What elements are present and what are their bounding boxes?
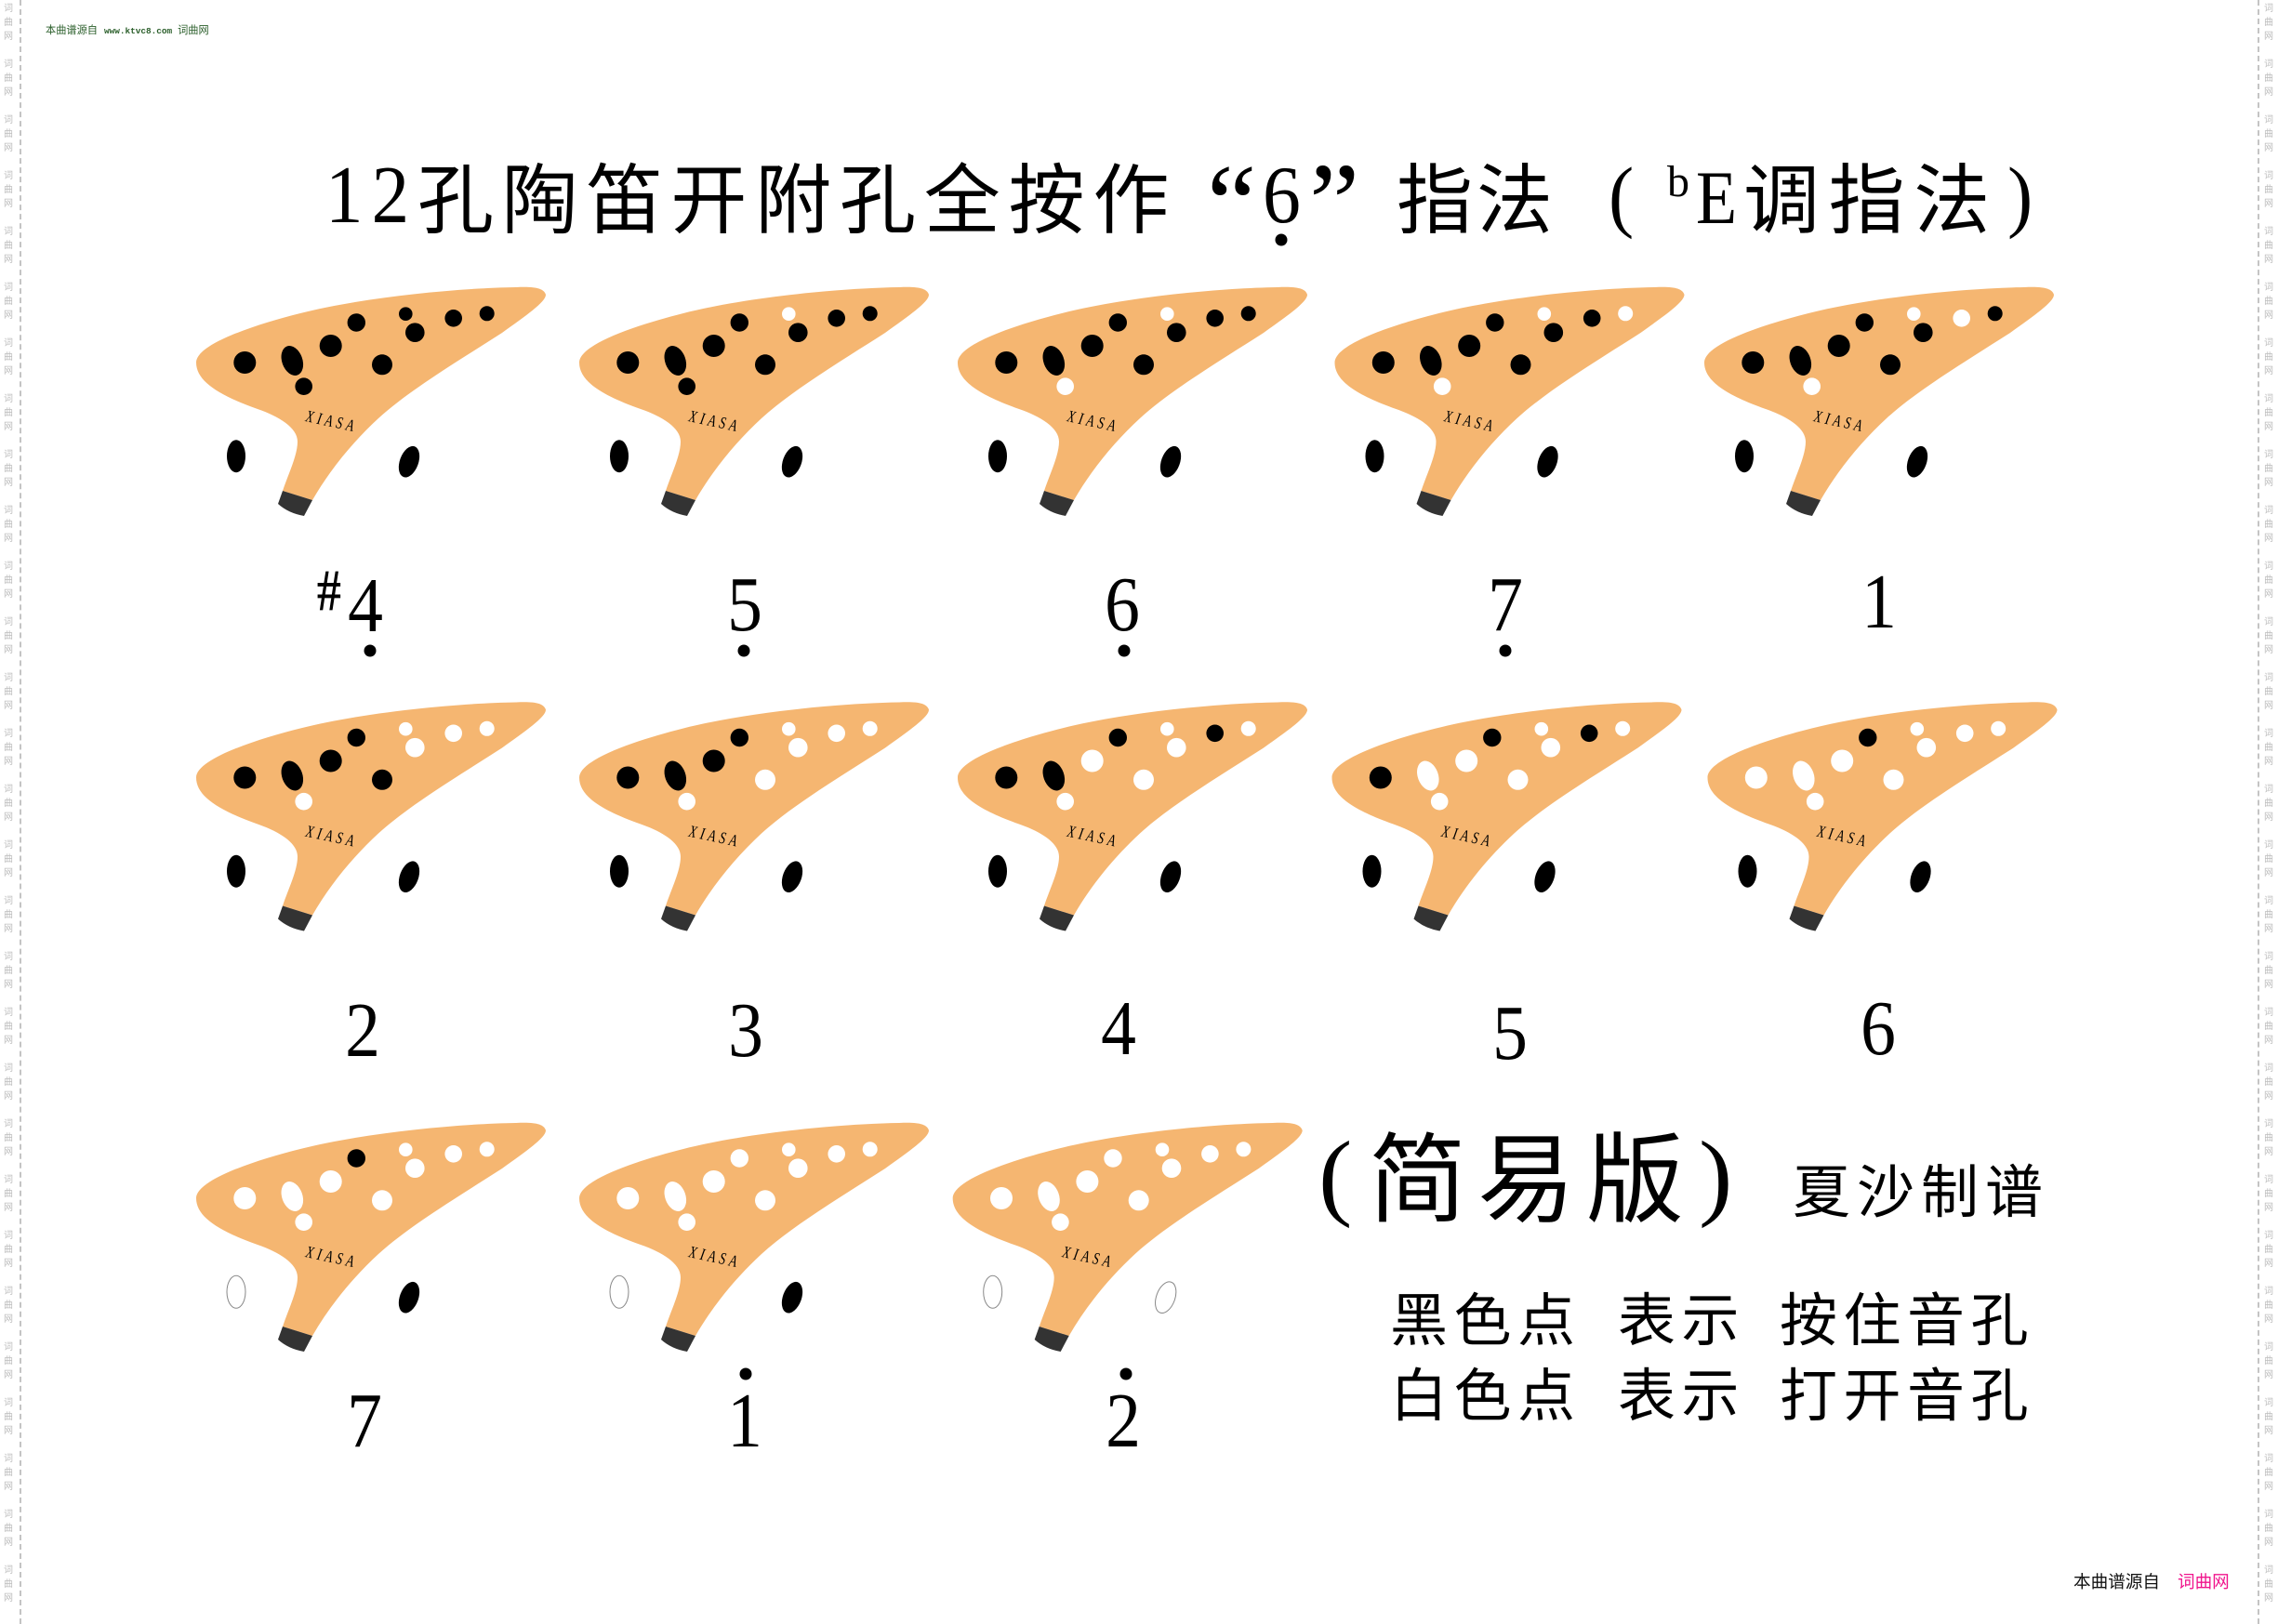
left watermark strip: 词 [4,1004,13,1018]
title: 孔陶笛开附孔全按作 [417,139,1177,249]
left watermark strip: 词 [4,167,13,181]
right watermark strip: 词 [2264,614,2273,627]
note label: low 7: 7 [1488,561,1523,648]
left watermark strip: 网 [4,418,13,432]
right watermark strip: 网 [2264,363,2273,376]
ocarina: high 2: XIASA [1060,1243,1116,1272]
right watermark strip: 词 [2264,335,2273,349]
left watermark strip: 网 [4,976,13,990]
right watermark strip: 词 [2264,56,2273,70]
right watermark strip: 网 [2264,1311,2273,1325]
legend: black dot: 按住音孔 [1780,1274,2034,1357]
right watermark strip: 网 [2264,1143,2273,1157]
ocarina: high 1 [579,1123,929,1352]
left watermark strip: 曲 [4,293,13,307]
left watermark strip: 曲 [4,1297,13,1311]
right watermark strip: 曲 [2264,572,2273,586]
left watermark strip: 词 [4,1171,13,1185]
left watermark strip: 曲 [4,1018,13,1032]
right watermark strip: 网 [2264,251,2273,265]
left watermark strip: 词 [4,0,13,14]
right watermark strip: 曲 [2264,1018,2273,1032]
right watermark strip: 曲 [2264,683,2273,697]
left watermark strip: 曲 [4,181,13,195]
left watermark strip: 词 [4,725,13,739]
left watermark strip: 网 [4,1422,13,1436]
note label: 7: 7 [347,1378,382,1464]
left watermark strip: 词 [4,1450,13,1464]
right watermark strip: 词 [2264,558,2273,572]
left watermark strip: 网 [4,363,13,376]
right watermark strip: 词 [2264,781,2273,795]
ocarina: 5: XIASA [1439,823,1495,852]
left watermark strip: 词 [4,1562,13,1576]
right watermark strip: 网 [2264,84,2273,98]
ocarina: sharp 4 [196,287,546,516]
left watermark strip: 曲 [4,125,13,139]
left watermark strip: 词 [4,1339,13,1353]
title: b [1667,157,1689,206]
right watermark strip: 词 [2264,1506,2273,1520]
left watermark strip: 网 [4,84,13,98]
right watermark strip: 词 [2264,167,2273,181]
legend: black dot [1390,1274,2034,1357]
title: E [1696,155,1737,240]
ocarina: 6 [1707,702,2057,931]
left watermark strip: 曲 [4,906,13,920]
right watermark strip: 曲 [2264,125,2273,139]
right watermark strip: 词 [2264,1060,2273,1074]
left watermark strip: 词 [4,1227,13,1241]
left watermark strip: 网 [4,1311,13,1325]
right watermark strip: 词 [2264,1004,2273,1018]
left watermark strip: 词 [4,446,13,460]
left watermark strip: 网 [4,1032,13,1046]
left watermark strip: 曲 [4,237,13,251]
ocarina: low 7 [1335,287,1685,516]
right watermark strip: 网 [2264,1199,2273,1213]
left watermark strip: 词 [4,669,13,683]
right watermark strip: 网 [2264,28,2273,42]
right watermark strip [2264,0,2273,1604]
ocarina: 7: XIASA [303,1243,359,1272]
left watermark strip: 曲 [4,1464,13,1478]
left watermark strip: 网 [4,1367,13,1380]
right watermark strip: 曲 [2264,1464,2273,1478]
right watermark strip: 词 [2264,1339,2273,1353]
left watermark strip: 曲 [4,572,13,586]
left watermark strip: 词 [4,112,13,125]
right watermark strip: 词 [2264,446,2273,460]
note label: high 1: 1 [727,1378,762,1464]
right watermark strip: 曲 [2264,237,2273,251]
left watermark strip: 曲 [4,516,13,530]
right watermark strip: 词 [2264,223,2273,237]
right watermark strip: 网 [2264,976,2273,990]
note label: sharp 4: # [317,560,341,623]
right watermark strip: 曲 [2264,627,2273,641]
legend: white dot: 表示 [1618,1349,1745,1433]
left watermark strip: 网 [4,1255,13,1269]
right watermark strip: 网 [2264,641,2273,655]
title: 12 [325,151,417,241]
heading: simple edition: ) [1699,1122,1732,1229]
right watermark strip: 网 [2264,920,2273,934]
left watermark strip: 词 [4,558,13,572]
right watermark strip: 词 [2264,837,2273,851]
right watermark strip: 曲 [2264,404,2273,418]
ocarina: low 5 [579,287,929,516]
right watermark strip: 曲 [2264,962,2273,976]
title: ) [2007,152,2033,240]
right watermark strip: 网 [2264,697,2273,711]
left watermark strip: 网 [4,1478,13,1492]
right watermark strip: 网 [2264,139,2273,153]
left watermark strip: 网 [4,865,13,878]
legend: white dot: 白色点 [1390,1349,1582,1433]
right watermark strip: 词 [2264,1450,2273,1464]
source note top left: 本曲谱源自 www.ktvc8.com 词曲网 [46,22,209,37]
right watermark strip: 曲 [2264,1129,2273,1143]
left watermark strip: 网 [4,753,13,767]
left watermark strip: 曲 [4,404,13,418]
left watermark strip: 词 [4,390,13,404]
left watermark strip: 词 [4,1283,13,1297]
right watermark strip: 词 [2264,502,2273,516]
right watermark strip: 网 [2264,195,2273,209]
left watermark strip: 曲 [4,70,13,84]
left watermark strip: 词 [4,56,13,70]
left watermark strip: 曲 [4,795,13,809]
left watermark strip: 网 [4,307,13,321]
right watermark strip: 网 [2264,1534,2273,1548]
left watermark strip: 词 [4,335,13,349]
title: ” [1309,140,1359,266]
note label: 2: 2 [345,987,380,1074]
ocarina: 7 [196,1123,546,1352]
title: ( [1609,152,1634,240]
right watermark strip: 曲 [2264,1185,2273,1199]
left watermark strip: 词 [4,892,13,906]
right watermark strip: 词 [2264,1171,2273,1185]
legend: white dot: 打开音孔 [1780,1349,2034,1433]
left watermark strip: 网 [4,586,13,600]
ocarina: 5 [1331,702,1681,931]
right watermark strip: 词 [2264,279,2273,293]
left watermark strip: 网 [4,697,13,711]
title [325,139,2033,266]
right watermark strip: 网 [2264,1422,2273,1436]
left watermark strip: 曲 [4,627,13,641]
right watermark strip: 词 [2264,1562,2273,1576]
right watermark strip: 曲 [2264,14,2273,28]
note label: 5: 5 [1492,990,1528,1076]
left watermark strip: 曲 [4,851,13,865]
legend: black dot: 表示 [1618,1274,1745,1357]
right watermark strip: 曲 [2264,1353,2273,1367]
ocarina: 4 [958,702,1307,931]
left watermark strip: 网 [4,1143,13,1157]
right watermark strip: 网 [2264,530,2273,544]
right watermark strip: 曲 [2264,906,2273,920]
note label: 1: 1 [1861,559,1897,645]
note label: 6: 6 [1861,985,1896,1072]
right watermark strip: 网 [2264,418,2273,432]
right watermark strip: 网 [2264,865,2273,878]
left watermark strip: 网 [4,1199,13,1213]
ocarina: 1: XIASA [1811,407,1867,436]
right watermark strip: 网 [2264,586,2273,600]
left watermark strip: 曲 [4,1408,13,1422]
right watermark strip: 词 [2264,1394,2273,1408]
title: 指法 [1397,139,1556,249]
title: “ [1207,141,1256,265]
ocarina: 6: XIASA [1815,823,1871,852]
note label: 4: 4 [1101,985,1136,1072]
left watermark strip [4,0,13,1604]
right watermark strip: 曲 [2264,795,2273,809]
left watermark strip: 曲 [4,14,13,28]
left watermark strip: 曲 [4,1185,13,1199]
left watermark strip: 词 [4,223,13,237]
right watermark strip: 网 [2264,1088,2273,1102]
right watermark strip: 网 [2264,1478,2273,1492]
ocarina: 4: XIASA [1065,823,1120,852]
note label: 3: 3 [728,987,763,1074]
right watermark strip: 词 [2264,1116,2273,1129]
left watermark strip: 词 [4,837,13,851]
left watermark strip: 曲 [4,1129,13,1143]
left watermark strip: 曲 [4,460,13,474]
left watermark strip: 曲 [4,683,13,697]
left watermark strip: 曲 [4,1576,13,1590]
ocarina: sharp 4: XIASA [303,407,359,436]
left watermark strip: 曲 [4,739,13,753]
title: 调指法 [1743,139,1999,249]
right watermark strip: 曲 [2264,1241,2273,1255]
left watermark strip: 词 [4,1060,13,1074]
heading: simple edition: 简易版 [1369,1102,1695,1243]
title: 6 [1263,150,1301,241]
left watermark strip: 词 [4,502,13,516]
ocarina: low 6 [958,287,1307,516]
note label: sharp 4 [317,560,383,656]
right watermark strip: 词 [2264,1283,2273,1297]
right watermark strip: 词 [2264,725,2273,739]
note label: high 2: 2 [1106,1378,1141,1464]
right watermark strip: 曲 [2264,1297,2273,1311]
left watermark strip: 词 [4,781,13,795]
right watermark strip: 曲 [2264,1074,2273,1088]
right watermark strip: 词 [2264,669,2273,683]
right watermark strip: 网 [2264,474,2273,488]
ocarina: 2 [196,702,546,931]
right watermark strip: 曲 [2264,1576,2273,1590]
note label: low 5: 5 [727,561,762,648]
left watermark strip: 网 [4,28,13,42]
left watermark strip: 词 [4,1394,13,1408]
ocarina: low 5: XIASA [686,407,742,436]
left watermark strip: 词 [4,614,13,627]
ocarina: 2: XIASA [303,823,359,852]
ocarina: low 7: XIASA [1442,407,1498,436]
left watermark strip: 网 [4,251,13,265]
ocarina: 1 [1704,287,2054,516]
left watermark strip: 网 [4,1590,13,1604]
ocarina: high 1: XIASA [686,1243,742,1272]
ocarina: 3 [579,702,929,931]
right watermark strip: 曲 [2264,516,2273,530]
ocarina: low 6: XIASA [1065,407,1120,436]
right watermark strip: 网 [2264,809,2273,823]
left watermark strip: 曲 [4,962,13,976]
right watermark strip: 曲 [2264,349,2273,363]
legend: white dot [1390,1349,2034,1433]
right watermark strip: 曲 [2264,851,2273,865]
left watermark strip: 网 [4,641,13,655]
left watermark strip: 词 [4,1116,13,1129]
right watermark strip: 曲 [2264,1408,2273,1422]
right watermark strip: 曲 [2264,460,2273,474]
left watermark strip: 词 [4,1506,13,1520]
ocarina: high 2 [953,1123,1303,1352]
ocarina: 3: XIASA [686,823,742,852]
left watermark strip: 词 [4,279,13,293]
left watermark strip: 曲 [4,1074,13,1088]
left watermark strip: 网 [4,809,13,823]
left watermark strip: 网 [4,474,13,488]
left watermark strip: 网 [4,1534,13,1548]
left watermark strip: 曲 [4,1241,13,1255]
left watermark strip: 曲 [4,1520,13,1534]
left watermark strip: 网 [4,195,13,209]
right watermark strip: 网 [2264,753,2273,767]
right watermark strip: 曲 [2264,181,2273,195]
right watermark strip: 网 [2264,1590,2273,1604]
right watermark strip: 网 [2264,307,2273,321]
right watermark strip: 网 [2264,1367,2273,1380]
right watermark strip: 曲 [2264,739,2273,753]
left watermark strip: 曲 [4,1353,13,1367]
legend: black dot: 黑色点 [1390,1274,1582,1357]
author credit: 夏沙制谱 [1793,1145,2049,1229]
left watermark strip: 网 [4,530,13,544]
right watermark strip: 曲 [2264,293,2273,307]
right watermark strip: 词 [2264,948,2273,962]
right watermark strip: 曲 [2264,70,2273,84]
heading: simple edition: ( [1318,1122,1352,1229]
right watermark strip: 网 [2264,1255,2273,1269]
note label: low 6: 6 [1105,561,1140,648]
right watermark strip: 词 [2264,0,2273,14]
right watermark strip: 曲 [2264,1520,2273,1534]
right watermark strip: 词 [2264,390,2273,404]
right watermark strip: 网 [2264,1032,2273,1046]
left watermark strip: 网 [4,139,13,153]
left watermark strip: 词 [4,948,13,962]
left watermark strip: 网 [4,920,13,934]
right watermark strip: 词 [2264,1227,2273,1241]
right watermark strip: 词 [2264,892,2273,906]
left watermark strip: 网 [4,1088,13,1102]
note label: sharp 4: 4 [348,562,383,649]
left watermark strip: 曲 [4,349,13,363]
right watermark strip: 词 [2264,112,2273,125]
source note bottom right: 本曲谱源自 词曲网 [2073,1568,2230,1593]
